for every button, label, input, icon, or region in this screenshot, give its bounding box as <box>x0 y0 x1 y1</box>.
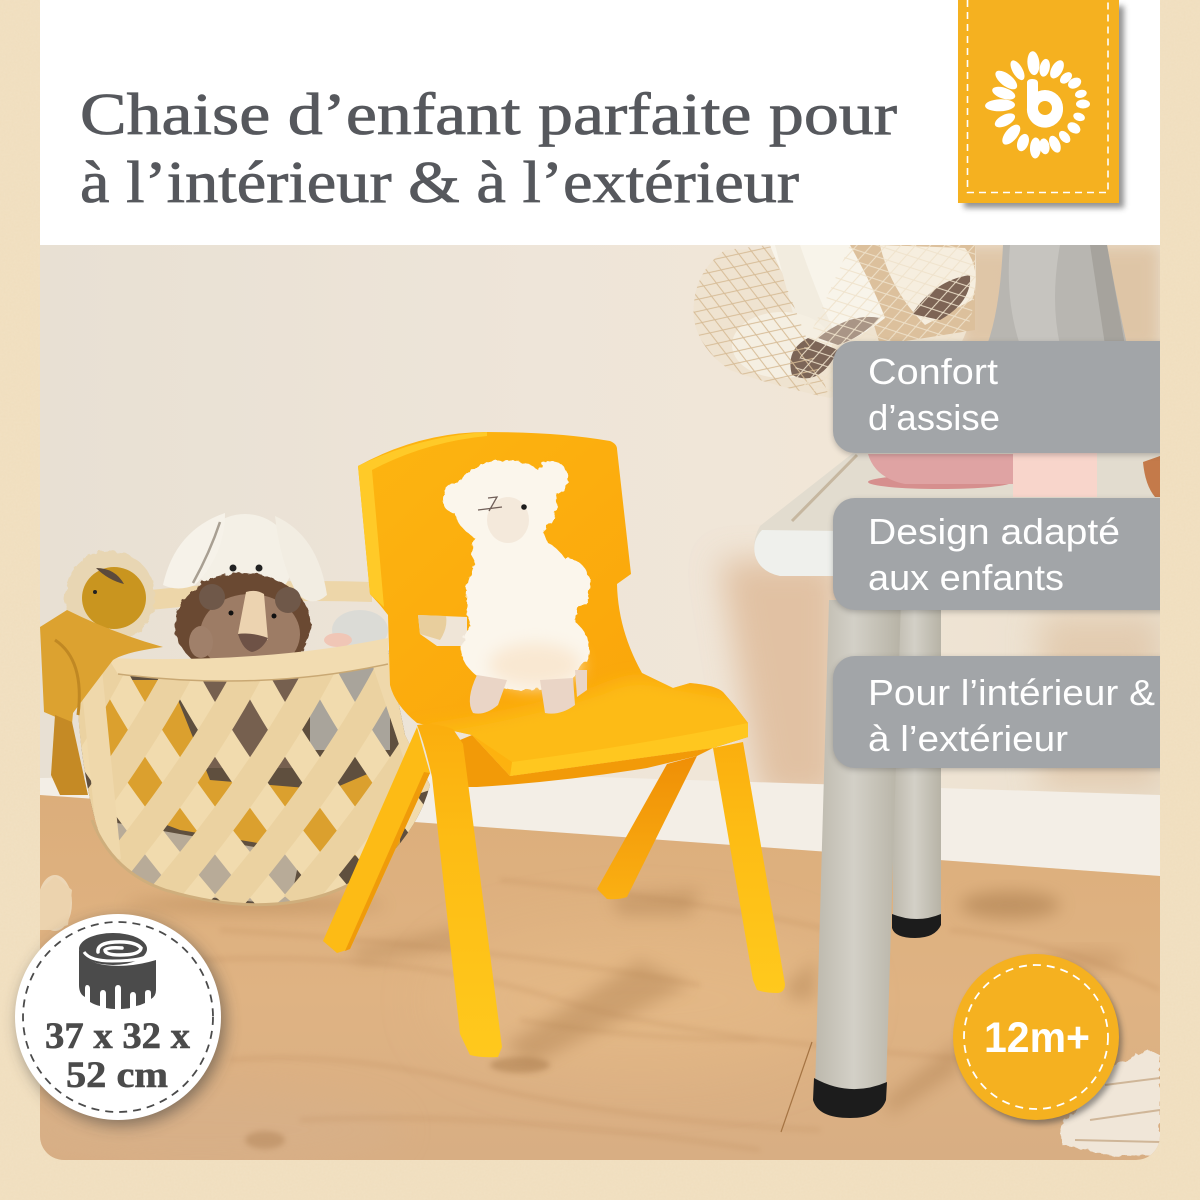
back right leg <box>597 756 697 899</box>
yellow chair <box>323 432 785 1057</box>
seat surface <box>444 672 748 776</box>
bunny plush <box>163 513 327 606</box>
table back leg <box>892 600 941 938</box>
back rim <box>150 581 372 610</box>
feature label: indoor and outdoor <box>833 656 1193 770</box>
pink cup <box>1013 450 1097 497</box>
yellow lion toy and blanket <box>40 551 163 795</box>
llama snout and eyes <box>478 497 529 543</box>
floor <box>0 795 1160 1170</box>
badge: age 12 months plus: 12m+ <box>984 1014 1090 1062</box>
feature label: comfort <box>833 341 1193 455</box>
orange bowl <box>1143 456 1160 497</box>
basket front rim <box>108 638 388 681</box>
llama feet <box>470 670 587 714</box>
feature label: child-friendly design <box>833 498 1193 612</box>
back left diagonal leg <box>323 727 430 953</box>
wall <box>40 245 1160 794</box>
feature label: comfort: d’assise <box>868 397 1000 438</box>
baseboard <box>40 773 1160 876</box>
table top <box>754 453 1160 576</box>
front right leg <box>713 742 785 993</box>
title <box>80 81 897 215</box>
chair back opening <box>418 615 467 646</box>
seat underside <box>460 735 713 787</box>
photo: room scene <box>0 245 1193 1170</box>
badge: dimensions: 52 cm <box>66 1055 168 1096</box>
badge: age 12 months plus <box>953 954 1122 1124</box>
brown lion plush <box>174 572 312 659</box>
llama plush <box>442 460 590 714</box>
header band <box>40 0 1160 245</box>
icon: measuring tape <box>79 933 156 1009</box>
basket of toys <box>78 513 430 906</box>
basket interior <box>78 650 430 904</box>
title: à l’intérieur & à l’extérieur <box>80 149 799 215</box>
feature label: child-friendly design: aux enfants <box>868 557 1064 598</box>
feature label: indoor and outdoor: à l’extérieur <box>868 718 1068 759</box>
feature label: comfort: Confort <box>868 351 998 392</box>
badge: dimensions <box>15 914 225 1125</box>
table front leg <box>813 600 901 1118</box>
feature label: indoor and outdoor: Pour l’intérieur & <box>868 672 1155 713</box>
net bag with plush legs <box>694 245 976 398</box>
table <box>754 450 1160 1118</box>
badge: dimensions: 37 x 32 x <box>45 1016 191 1057</box>
icon: logo flower <box>985 51 1090 159</box>
wooden toy <box>38 875 72 931</box>
title: Chaise d’enfant parfaite pour <box>80 81 897 147</box>
woven strips <box>78 674 424 904</box>
chair and basket floor shadows <box>125 890 960 1115</box>
pink plate <box>868 454 1015 489</box>
grey knit fabric <box>987 245 1127 345</box>
brand tag with logo <box>958 0 1124 208</box>
rug fringe <box>1060 1050 1160 1157</box>
grey elephant plush <box>324 610 388 650</box>
chair back and seat <box>358 432 760 790</box>
feature label: child-friendly design: Design adapté <box>868 511 1120 552</box>
front left leg <box>417 724 502 1057</box>
